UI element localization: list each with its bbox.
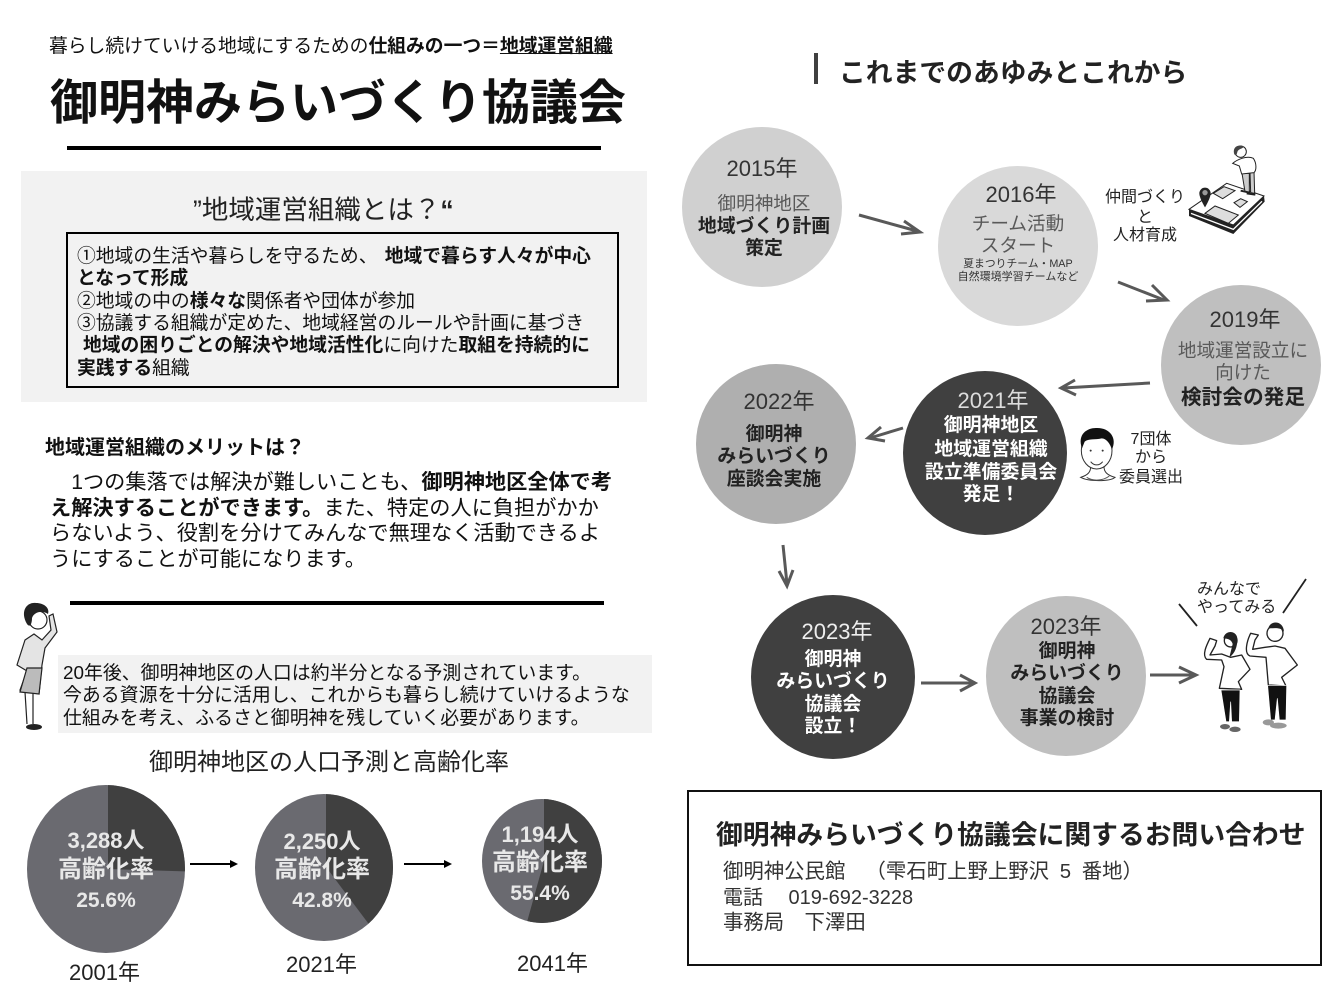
- milestone: 2023 established: 設立！: [805, 716, 861, 737]
- definition text box: となって形成: [77, 267, 188, 288]
- milestone: 2015: 策定: [745, 238, 783, 259]
- icon: person on map: [1188, 146, 1265, 234]
- subtitle: 暮らし続けていける地域にするための仕組みの一つ＝地域運営組織: [49, 35, 613, 56]
- definition text box: ②地域の中の様々な関係者や団体が参加: [77, 290, 415, 311]
- note: team building: と: [1137, 209, 1153, 226]
- panel: definition: [21, 171, 647, 402]
- pie chart: 2001: 25.6%: [76, 889, 136, 912]
- milestone: 2015: 御明神地区: [718, 193, 810, 214]
- contact details: [723, 860, 1143, 934]
- panel: forecast note: 今ある資源を十分に活用し、これからも暮らし続けていけるような: [63, 685, 630, 706]
- arrow: 2001 to 2021: [190, 860, 238, 868]
- contact heading: 御明神みらいづくり協議会に関するお問い合わせ: [716, 820, 1306, 850]
- milestone: 2023 established: 御明神: [805, 649, 861, 670]
- definition text box: ③協議する組織が定めた、地域経営のルールや計画に基づき: [77, 312, 584, 333]
- panel: forecast note: [58, 655, 652, 733]
- milestone: 2023 planning: 御明神: [1039, 641, 1095, 662]
- milestone: 2022: みらいづくり: [717, 446, 831, 467]
- pie chart: 2041: 55.4%: [510, 882, 570, 905]
- contact details: 電話 019-692-3228: [723, 887, 913, 909]
- pie chart: 2021: [255, 794, 393, 941]
- milestone: 2021: [903, 371, 1067, 535]
- arrow: 2022 to 2023: [778, 544, 794, 590]
- definition text box: ①地域の生活や暮らしを守るため、 地域で暮らす人々が中心: [77, 245, 591, 266]
- milestone: 2016: 2016年: [986, 182, 1056, 207]
- arrow: planning to action: [1150, 666, 1200, 684]
- note: team building: 人材育成: [1113, 227, 1177, 244]
- milestone: 2016: 夏まつりチーム・MAP: [963, 258, 1073, 270]
- milestone: 2021: 発足！: [963, 484, 1019, 505]
- milestone: 2022: 御明神: [746, 424, 802, 445]
- milestone: 2023 planning: みらいづくり: [1010, 663, 1124, 684]
- icon: flexing couple: [1204, 622, 1298, 732]
- milestone: 2023 established: みらいづくり: [776, 671, 890, 692]
- definition heading: ”地域運営組織とは？“: [193, 195, 454, 225]
- milestone: 2015: 地域づくり計画: [698, 216, 830, 237]
- milestone: 2015: 2015年: [727, 156, 797, 181]
- merit paragraph: え解決することができます。また、特定の人に負担がかか: [50, 497, 599, 520]
- merit paragraph: らないよう、役割を分けてみんなで無理なく活動できるよ: [50, 522, 600, 545]
- pie chart: 2001: 3,288人: [67, 828, 145, 853]
- milestone: 2023 planning: 事業の検討: [1020, 708, 1114, 729]
- milestone: 2021: 2021年: [958, 388, 1028, 413]
- definition text box: 実践する組織: [77, 357, 190, 378]
- panel: forecast note: 20年後、御明神地区の人口は約半分となる予測されています。: [63, 663, 591, 684]
- pie chart: 2041: 1,194人: [501, 822, 579, 847]
- pie chart: 2021: 42.8%: [292, 889, 352, 912]
- milestone: 2019: 2019年: [1210, 307, 1280, 332]
- milestone: 2019: 向けた: [1215, 362, 1271, 383]
- merit paragraph: 1つの集落では解決が難しいことも、御明神地区全体で考: [71, 471, 612, 494]
- note: seven groups: [1119, 430, 1183, 486]
- panel: forecast note: 仕組みを考え、ふるさと御明神を残していく必要があります。: [63, 708, 589, 729]
- label: 2021: 2021年: [286, 952, 357, 977]
- label: 2041: 2041年: [517, 951, 588, 976]
- speech: let's try together: みんなで: [1197, 581, 1261, 598]
- arrow: 2021 to 2022: [864, 426, 904, 442]
- milestone: 2023 planning: [986, 596, 1146, 756]
- pie chart: 2001: 高齢化率: [58, 856, 154, 883]
- note: team building: [1105, 188, 1185, 244]
- arrow: 2021 to 2041: [404, 860, 452, 868]
- note: seven groups: から: [1135, 449, 1167, 466]
- contact details: 御明神公民館 （雫石町上野上野沢 5 番地）: [723, 861, 1143, 883]
- icon: young man: [1080, 428, 1116, 482]
- arrow: 2019 to 2021: [1058, 378, 1150, 396]
- pie chart: 2041: 高齢化率: [492, 849, 588, 876]
- title rule: [67, 146, 601, 150]
- milestone: 2023 established: 2023年: [802, 619, 872, 644]
- panel: contact: [687, 790, 1322, 966]
- milestone: 2022: 2022年: [744, 389, 814, 414]
- chart heading: 御明神地区の人口予測と高齢化率: [149, 749, 509, 776]
- definition text box: 地域の困りごとの解決や地域活性化に向けた取組を持続的に: [83, 334, 590, 355]
- section rule: [70, 601, 604, 605]
- pie chart: 2021: 2,250人: [283, 829, 361, 854]
- speech: let's try together: やってみる: [1197, 599, 1276, 616]
- timeline heading: これまでのあゆみとこれから: [839, 58, 1187, 88]
- timeline heading bar: [814, 53, 818, 84]
- milestone: 2016: チーム活動: [972, 213, 1064, 234]
- arrow: 2016 to 2019: [1118, 280, 1170, 302]
- milestone: 2022: [696, 364, 856, 524]
- milestone: 2023 established: [751, 595, 915, 759]
- speech: let's try together: [1178, 578, 1307, 627]
- note: seven groups: 7団体: [1131, 431, 1171, 448]
- milestone: 2021: 地域運営組織: [934, 439, 1048, 460]
- milestone: 2021: 御明神地区: [944, 415, 1038, 436]
- merit heading: 地域運営組織のメリットは？: [45, 437, 305, 459]
- milestone: 2016: 自然環境学習チームなど: [958, 271, 1078, 283]
- milestone: 2019: [1161, 285, 1321, 445]
- contact details: 事務局 下澤田: [723, 912, 866, 934]
- merit paragraph: [50, 470, 612, 571]
- milestone: 2023 planning: 2023年: [1031, 614, 1101, 639]
- note: seven groups: 委員選出: [1119, 469, 1183, 486]
- milestone: 2023 established: 協議会: [805, 694, 861, 715]
- milestone: 2019: 検討会の発足: [1181, 386, 1305, 409]
- arrow: 2015 to 2016: [858, 214, 924, 236]
- milestone: 2019: 地域運営設立に: [1178, 340, 1308, 361]
- note: team building: 仲間づくり: [1105, 189, 1185, 206]
- title: 御明神みらいづくり協議会: [50, 77, 626, 130]
- pie chart: 2021: 高齢化率: [274, 856, 370, 883]
- icon: thinking woman: [16, 602, 58, 730]
- pie chart: 2041: [482, 799, 602, 923]
- arrow: 2023 to planning: [921, 674, 978, 692]
- milestone: 2016: [938, 166, 1098, 326]
- merit paragraph: うにすることが可能になります。: [50, 548, 366, 571]
- definition text box: [66, 232, 619, 388]
- milestone: 2016: スタート: [981, 235, 1055, 256]
- milestone: 2021: 設立準備委員会: [925, 462, 1057, 483]
- milestone: 2015: [682, 127, 842, 287]
- label: 2001: 2001年: [69, 960, 140, 985]
- milestone: 2022: 座談会実施: [727, 469, 821, 490]
- pie chart: 2001: [27, 785, 185, 953]
- milestone: 2023 planning: 協議会: [1039, 686, 1095, 707]
